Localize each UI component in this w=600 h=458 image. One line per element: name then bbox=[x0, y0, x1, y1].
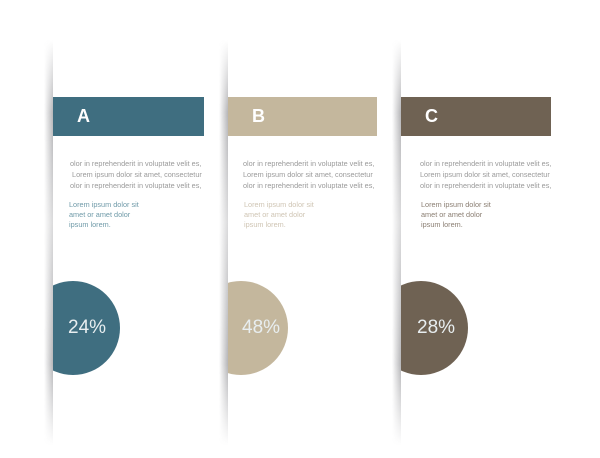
subtext A bbox=[69, 200, 139, 229]
subtext A: amet or amet dolor bbox=[69, 210, 130, 219]
circle B 48% bbox=[228, 281, 288, 375]
shadow C bbox=[393, 48, 401, 436]
panel A header bar: A bbox=[77, 106, 90, 126]
text A: Lorem ipsum dolor sit amet, consectetur bbox=[72, 170, 202, 179]
circle C 28% bbox=[401, 281, 468, 375]
text C bbox=[420, 159, 551, 190]
text B: Lorem ipsum dolor sit amet, consectetur bbox=[243, 170, 373, 179]
shadow B bbox=[220, 48, 228, 436]
text A: olor in reprehenderit in voluptate velit es, bbox=[70, 181, 201, 190]
panel C header bar bbox=[401, 97, 551, 136]
panel B header bar bbox=[228, 97, 377, 136]
subtext B: amet or amet dolor bbox=[244, 210, 305, 219]
panel C header bar: C bbox=[425, 106, 438, 126]
subtext C: amet or amet dolor bbox=[421, 210, 482, 219]
subtext B bbox=[244, 200, 314, 229]
text B bbox=[243, 159, 374, 190]
subtext A: Lorem ipsum dolor sit bbox=[69, 200, 139, 209]
text C: olor in reprehenderit in voluptate velit es, bbox=[420, 181, 551, 190]
text A bbox=[70, 159, 202, 190]
shadow A bbox=[45, 48, 53, 436]
circle C 28%: 28% bbox=[417, 317, 455, 338]
panel A header bar bbox=[53, 97, 204, 136]
text C: olor in reprehenderit in voluptate velit es, bbox=[420, 159, 551, 168]
subtext B: ipsum lorem. bbox=[244, 220, 286, 229]
panel B header bar: B bbox=[252, 106, 265, 126]
circle A 24% bbox=[53, 281, 120, 375]
subtext A: ipsum lorem. bbox=[69, 220, 111, 229]
text B: olor in reprehenderit in voluptate velit es, bbox=[243, 159, 374, 168]
text C: Lorem ipsum dolor sit amet, consectetur bbox=[420, 170, 550, 179]
subtext B: Lorem ipsum dolor sit bbox=[244, 200, 314, 209]
circle B 48%: 48% bbox=[242, 317, 280, 338]
subtext C: Lorem ipsum dolor sit bbox=[421, 200, 491, 209]
text B: olor in reprehenderit in voluptate velit es, bbox=[243, 181, 374, 190]
subtext C: ipsum lorem. bbox=[421, 220, 463, 229]
subtext C bbox=[421, 200, 491, 229]
text A: olor in reprehenderit in voluptate velit es, bbox=[70, 159, 201, 168]
circle A 24%: 24% bbox=[68, 317, 106, 338]
